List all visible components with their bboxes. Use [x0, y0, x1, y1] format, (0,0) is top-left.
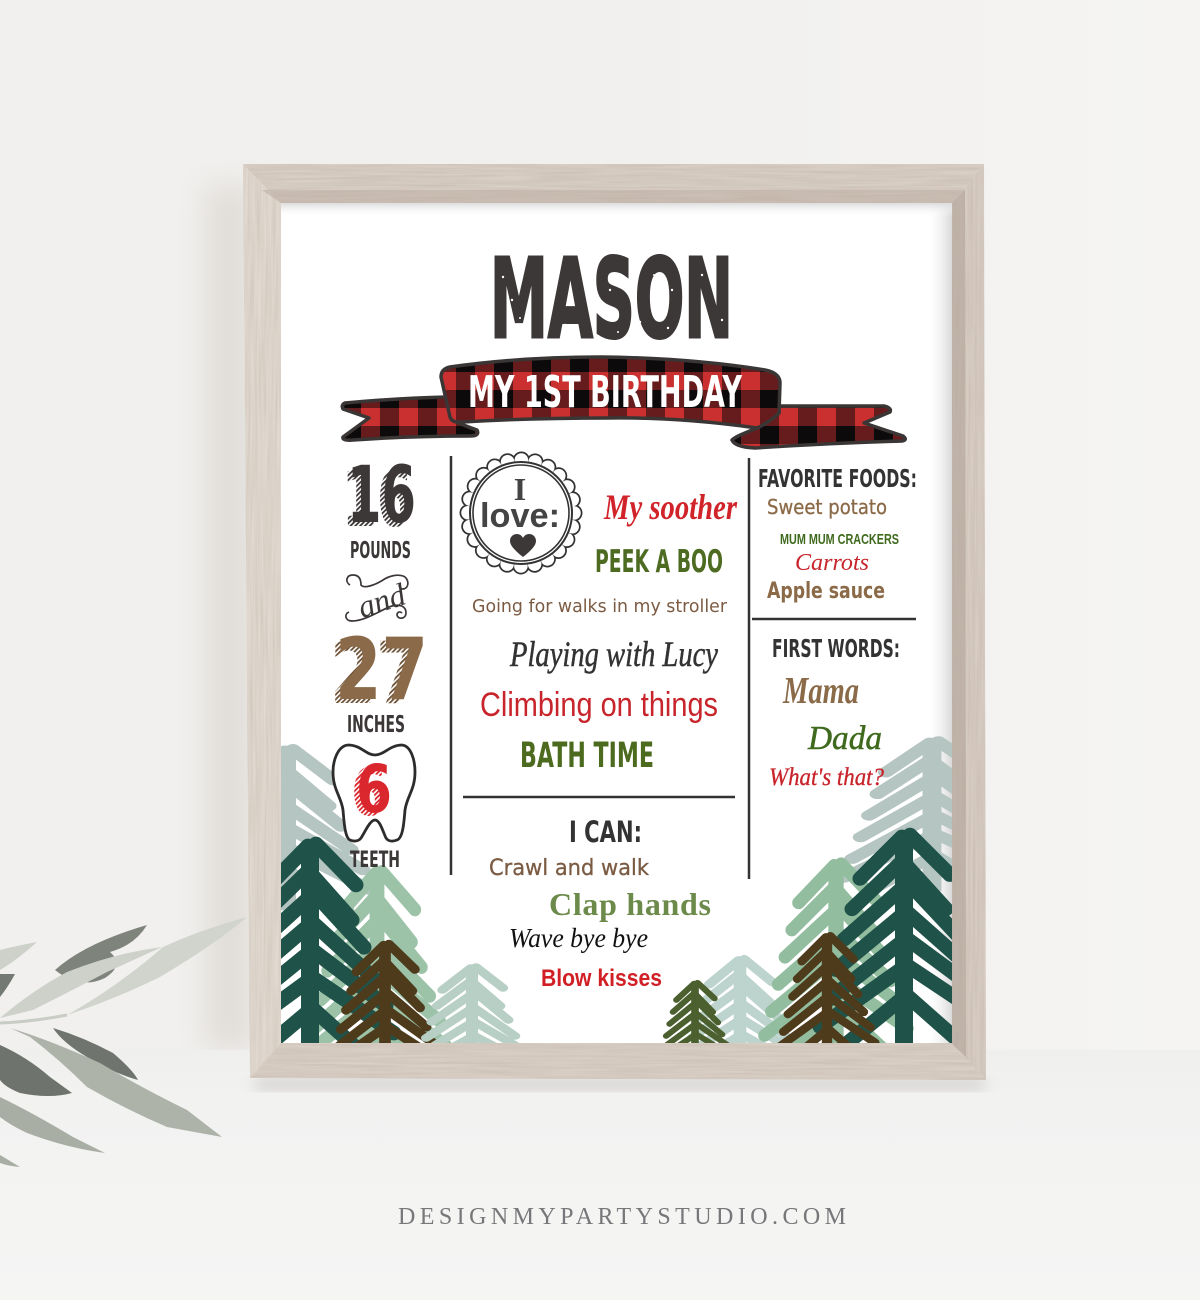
- stat: 16 pounds: 16: [347, 451, 416, 541]
- badge: I love: [468, 460, 574, 566]
- list: first words: Dada: [807, 720, 882, 757]
- list: things I love: [472, 487, 738, 776]
- column dividers: [451, 456, 916, 879]
- list: things I love: PEEK A BOO: [595, 544, 723, 580]
- wall shadow left of frame: [205, 185, 255, 1050]
- frame shadow on shelf: [255, 1078, 985, 1090]
- list: things I love: My soother: [603, 487, 738, 527]
- list: favorite foods: MUM MUM CRACKERS: [780, 531, 899, 548]
- stat: 27 inches: 27: [335, 620, 428, 720]
- icon: tooth with 6 teeth: 6: [351, 754, 387, 831]
- list: favorite foods: Apple sauce: [767, 579, 885, 604]
- list: favorite foods: Sweet potato: [767, 495, 887, 519]
- banner: My 1st Birthday: [342, 357, 905, 448]
- flourish: and: and: [353, 576, 411, 625]
- list: I can: [489, 815, 711, 992]
- list: first words: Mama: [782, 670, 859, 712]
- list: I can: Clap hands: [549, 886, 711, 922]
- list: I can: Wave bye bye: [509, 923, 648, 953]
- icon: tooth with 6 teeth: TEETH: [350, 848, 400, 873]
- banner: My 1st Birthday: MY 1ST BIRTHDAY: [468, 367, 743, 418]
- stat: 27 inches: INCHES: [347, 712, 405, 738]
- stat: 27 inches: 27: [330, 624, 422, 724]
- icon: tooth with 6 teeth: [333, 745, 415, 873]
- icon: tooth with 6 teeth: 6: [356, 751, 392, 828]
- title: Mason: MASON: [490, 235, 733, 363]
- list: first words: [769, 634, 900, 791]
- plant: olive branch: [0, 917, 247, 1167]
- list: things I love: Playing with Lucy: [509, 634, 718, 674]
- scene: framed birthday poster on a shelf: [0, 164, 990, 1224]
- watermark: DESIGNMYPARTYSTUDIO.COM: [398, 1204, 846, 1230]
- forest: right trees: [659, 741, 1020, 1081]
- badge: I love: I: [514, 471, 526, 507]
- list: favorite foods: [758, 464, 917, 604]
- list: I can: Blow kisses: [541, 965, 662, 992]
- list: favorite foods: FAVORITE FOODS:: [758, 464, 917, 493]
- stat: 16 pounds: [342, 451, 416, 564]
- stat: 16 pounds: POUNDS: [350, 538, 411, 564]
- list: first words: What's that?: [769, 764, 884, 791]
- list: things I love: BATH TIME: [520, 736, 654, 776]
- poster paper: [281, 203, 952, 1043]
- stat: 16 pounds: 16: [342, 455, 412, 545]
- list: things I love: Going for walks in my stroller: [472, 596, 728, 617]
- badge: I love: love:: [480, 497, 560, 535]
- list: first words: FIRST WORDS:: [772, 634, 900, 663]
- forest: left trees: [281, 744, 520, 1043]
- shelf: [0, 1050, 1200, 1300]
- list: I can: Crawl and walk: [489, 856, 649, 881]
- list: favorite foods: Carrots: [795, 550, 869, 576]
- picture frame: [243, 164, 986, 1080]
- list: I can: I CAN:: [569, 815, 642, 849]
- list: things I love: Climbing on things: [480, 686, 718, 724]
